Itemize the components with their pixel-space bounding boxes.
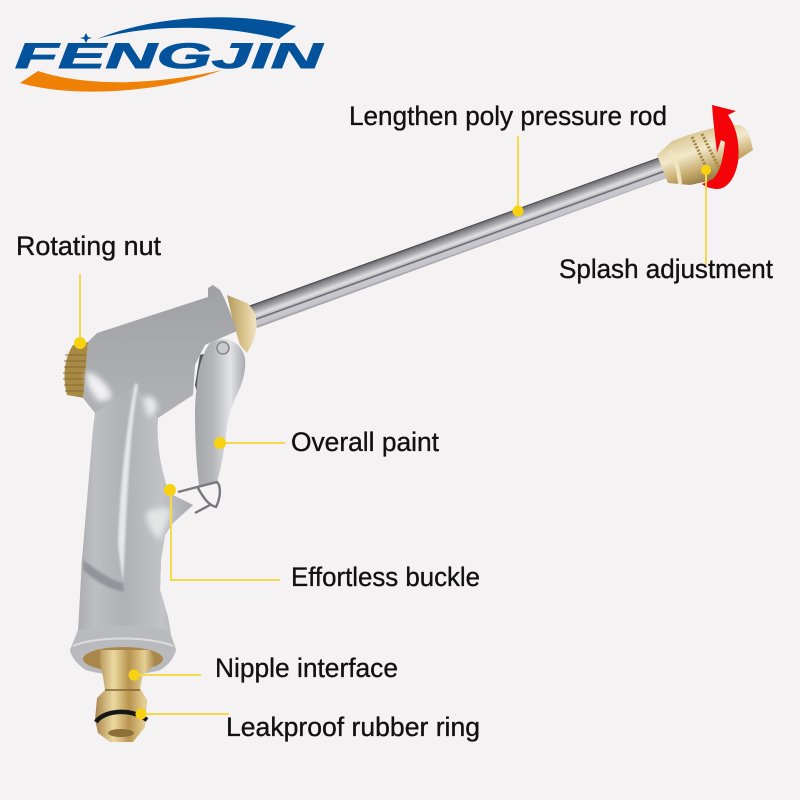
callout: Leakproof rubber ring [136,708,480,742]
trigger [195,339,245,486]
rod [248,157,672,328]
logo: FENGJIN: FENGJIN [15,37,323,76]
callout: Nipple interface [128,653,398,683]
callout: Leakproof rubber ring: Leakproof rubber ring [226,712,480,742]
brass collar [227,295,257,353]
callout: Lengthen poly pressure rod: Lengthen poly pressure rod [349,101,667,131]
rotating nut knurl [63,342,88,398]
callout: Nipple interface: Nipple interface [215,653,398,683]
wire buckle [178,482,220,513]
logo: FENGJIN [15,17,323,92]
spray gun [63,105,753,742]
callout: Overall paint: Overall paint [291,427,439,457]
callout: Lengthen poly pressure rod [349,101,667,216]
callout: Splash adjustment [559,165,773,284]
trigger dark gap [195,352,210,392]
nozzle [657,125,753,185]
callout: Rotating nut [16,231,161,349]
handle shading [70,385,193,674]
gun body [70,285,237,674]
trigger pivot [217,342,229,354]
rubber ring [96,712,147,722]
callout: Effortless buckle: Effortless buckle [291,562,480,592]
nipple brass connector [83,647,163,742]
callout: Rotating nut: Rotating nut [16,231,161,261]
callout: Overall paint [214,427,439,457]
callout: Effortless buckle [164,484,480,592]
rotation arrow [702,105,739,189]
body highlights [86,372,112,402]
callout: Splash adjustment: Splash adjustment [559,254,773,284]
